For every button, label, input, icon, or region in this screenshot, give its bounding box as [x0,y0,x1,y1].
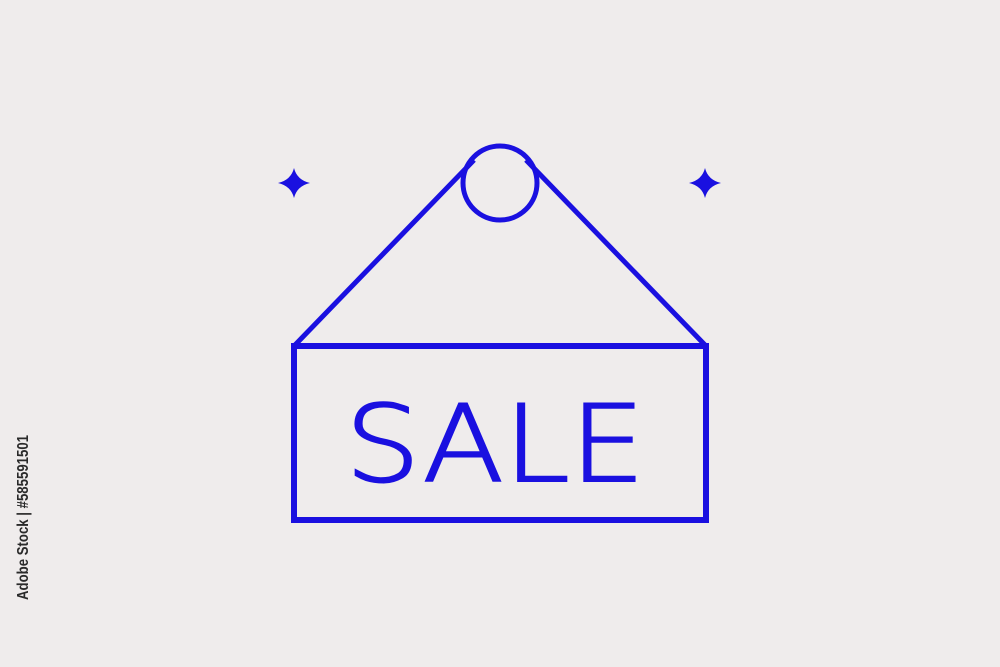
icon: star right [689,168,721,198]
icon: hanging string [295,160,705,345]
watermark side text: Adobe Stock | #585591501 [15,435,32,600]
icon: star left [278,168,310,198]
icon: hanging ring [463,146,537,220]
sign text: SALE [345,383,645,506]
sign board [294,346,706,520]
